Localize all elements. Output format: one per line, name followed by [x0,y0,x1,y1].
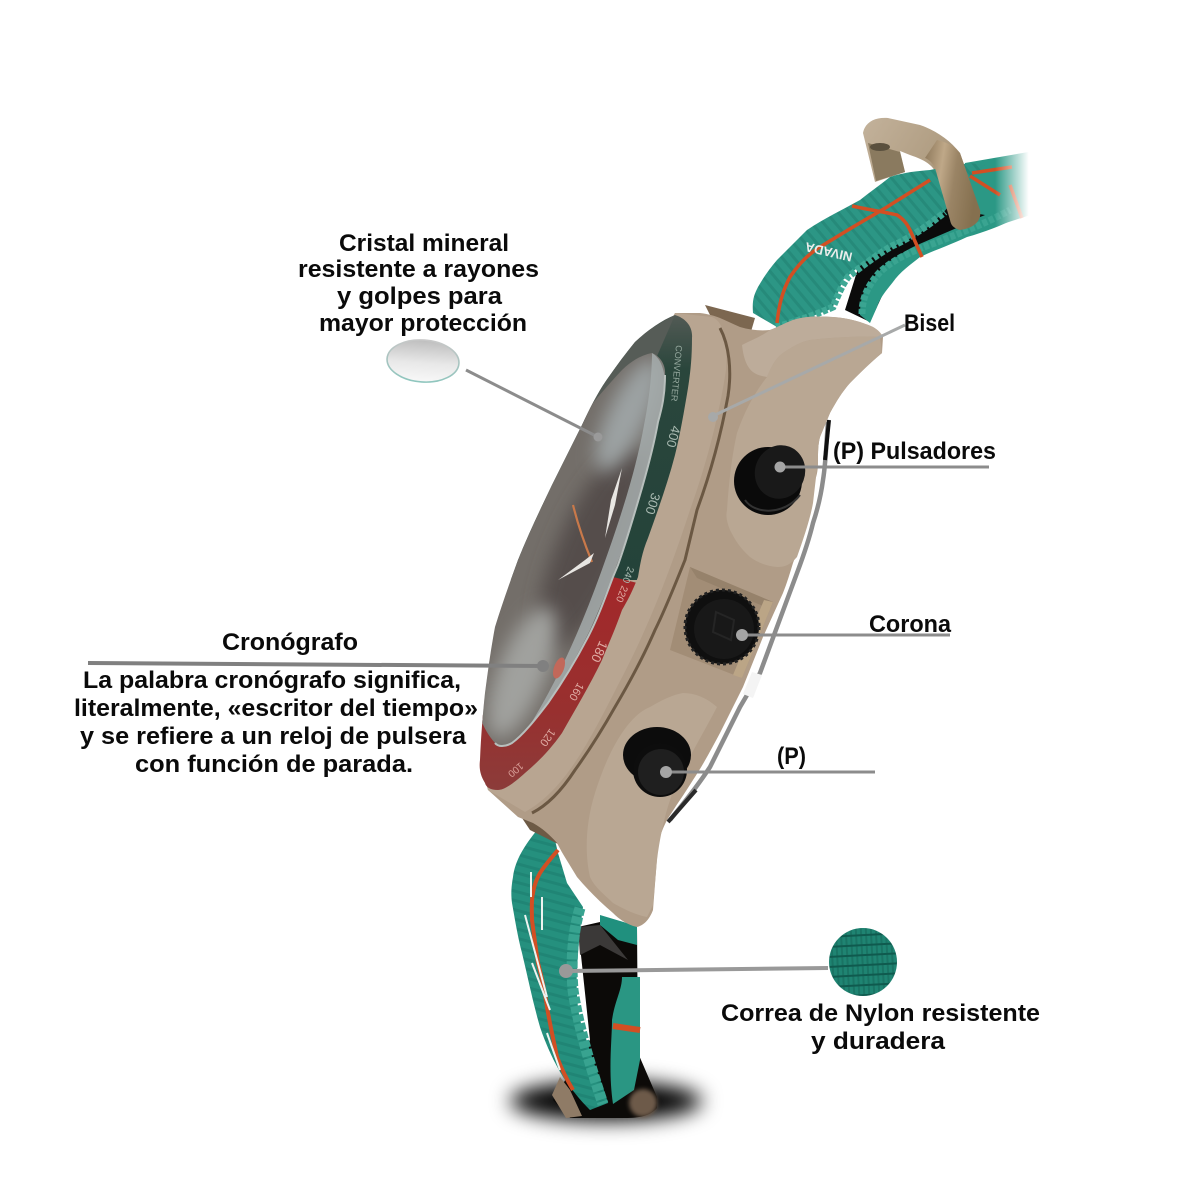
leader: crystal [466,370,602,442]
bezel numerals: 120 [537,726,557,748]
text: crystal: resistente a rayones [298,256,539,283]
bezel numerals: CONVERTER [669,345,684,402]
text: crystal: Cristal mineral [339,230,509,257]
leader: bottom pusher [660,766,875,778]
text: nylon strap [721,1000,1040,1055]
crystal [482,353,666,745]
bezel numerals: 220 [613,584,629,604]
white tab [743,672,762,698]
leader: chronograph [88,660,549,672]
leader: pushers [774,462,989,472]
crystal edge [495,375,665,746]
bezel numerals: 240 [619,565,636,585]
icon: nylon swatch [829,928,897,996]
green bezel [510,315,692,580]
bezel numerals [505,345,684,779]
text: chronograph: y se refiere a un reloj de pulsera [80,723,467,750]
label: bezel: Bisel [904,310,955,337]
strap orange stitching [777,167,1022,323]
bezel ring [480,313,727,812]
case body [480,313,883,927]
pusher bottom [623,727,691,797]
text: nylon strap: y duradera [811,1028,946,1055]
text: chronograph: La palabra cronógrafo significa, [83,667,461,694]
white fade [995,140,1040,235]
watch hands [551,468,622,680]
text: crystal: y golpes para [337,283,503,310]
text: chronograph: con función de parada. [135,751,413,778]
leader: strap [559,964,828,978]
buckle loop [863,118,980,230]
bezel groove [532,328,730,813]
watch case [480,305,883,927]
text: crystal [298,230,539,337]
bezel numerals: 400 [663,424,684,449]
label: crown: Corona [869,611,952,638]
text: chronograph: literalmente, «escritor del tiempo» [74,695,478,722]
watch strap: lower [511,830,657,1118]
bezel numerals: 180 [588,639,611,665]
bezel numerals: 100 [505,760,525,779]
watch strap: upper [753,140,1040,327]
label: bottom pusher: (P) [777,743,806,770]
label: pushers: (P) Pulsadores [833,438,996,465]
leader: crown [736,629,950,641]
red bezel [480,577,636,790]
bezel numerals: 300 [642,491,663,516]
icon: crystal lens [386,338,460,384]
text: chronograph [74,629,478,778]
leader: bezel [708,325,905,422]
floor shadow [510,1081,702,1121]
watch face [480,315,692,790]
text: crystal: mayor protección [319,310,527,337]
pusher top [734,438,813,515]
strap label: NIVADA [803,239,854,265]
lower strap stitching [532,850,573,1090]
lighter lug panels [726,337,882,567]
text: nylon strap: Correa de Nylon resistente [721,1000,1040,1027]
crown housing [670,567,773,678]
case back edge [668,420,829,822]
crown [685,590,759,664]
buckle right leg [925,140,980,230]
text: chronograph: Cronógrafo [222,629,358,656]
bezel numerals: 160 [566,680,586,702]
